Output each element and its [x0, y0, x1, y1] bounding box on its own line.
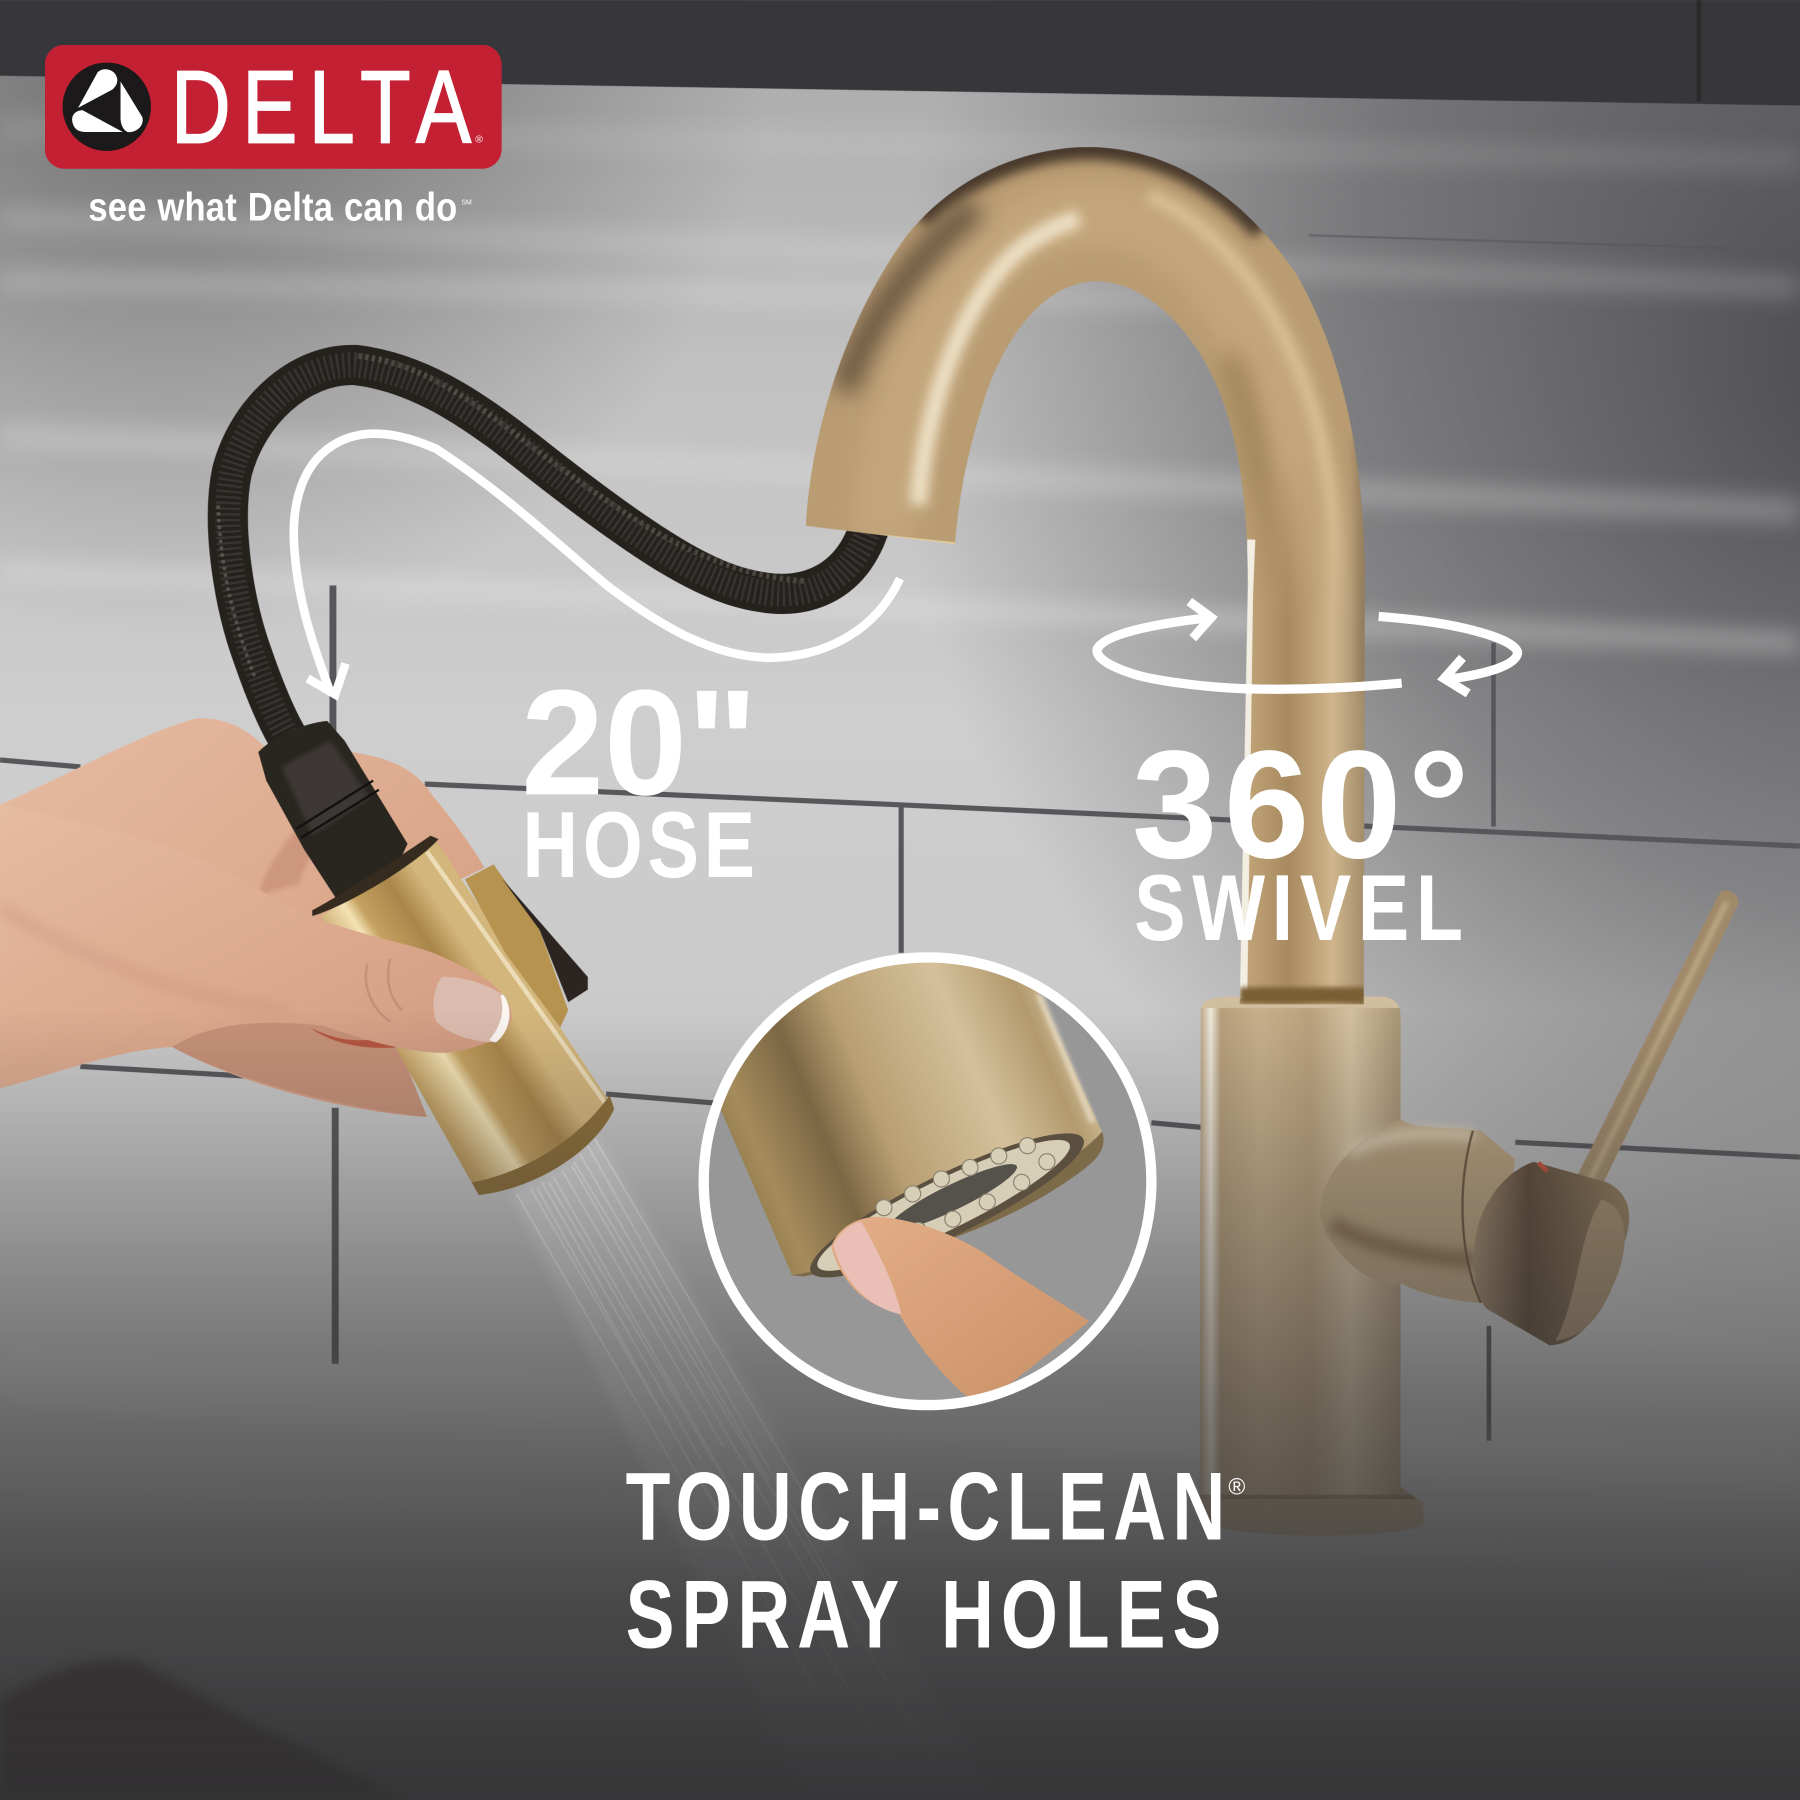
black hose connector [258, 721, 408, 902]
water spray [511, 1136, 999, 1800]
sprayer button housing [465, 864, 568, 1027]
arrows: swivel [1097, 602, 1518, 693]
inset fingertip [831, 1217, 1089, 1406]
caption: Touch-Clean spray holes [626, 1453, 1245, 1669]
wordmark: DELTA [171, 48, 483, 164]
callout: 20 inch hose: HOSE [522, 793, 760, 898]
caption: Touch-Clean spray holes: TOUCH-CLEAN [626, 1453, 1232, 1561]
inset background [704, 957, 1151, 1405]
tagline: see what Delta can do [88, 184, 457, 229]
callout: 360 swivel: SWIVEL [1134, 856, 1470, 961]
caption: Touch-Clean spray holes: ® [1228, 1474, 1245, 1500]
callout: 360 swivel [1097, 602, 1518, 961]
thumbnail [433, 977, 508, 1042]
label: 360° [1132, 719, 1469, 891]
caption: Touch-Clean spray holes: SPRAY HOLES [626, 1561, 1228, 1669]
hand holding sprayer [0, 718, 614, 1195]
label: 20" [521, 658, 758, 826]
faucet spout [792, 138, 1378, 1010]
logo: Delta: ® [475, 134, 483, 145]
pull-down hose [218, 356, 872, 740]
inset: touch-clean spray holes [689, 918, 1151, 1406]
lever [1575, 890, 1738, 1194]
handle knob [1474, 1162, 1629, 1345]
faucet base body [1200, 996, 1424, 1536]
red badge [45, 45, 502, 169]
faucet base and handle [1194, 890, 1738, 1550]
logo: Delta [45, 45, 502, 229]
inset ring [704, 957, 1151, 1405]
handle hub [1320, 1119, 1515, 1303]
top dark band [0, 0, 1800, 106]
callout: 20 inch hose [294, 434, 900, 898]
thumb [0, 804, 512, 1079]
sprayer body [321, 841, 614, 1195]
logo: Delta: SM [461, 199, 472, 206]
icon: triangle mark [63, 63, 151, 151]
arrow: hose length [294, 434, 900, 695]
lower dark vignette [0, 1010, 1800, 1800]
hand back and fingers [0, 718, 484, 1117]
bottom-left blurred hand [0, 1660, 402, 1800]
inset spray head [721, 962, 1102, 1276]
